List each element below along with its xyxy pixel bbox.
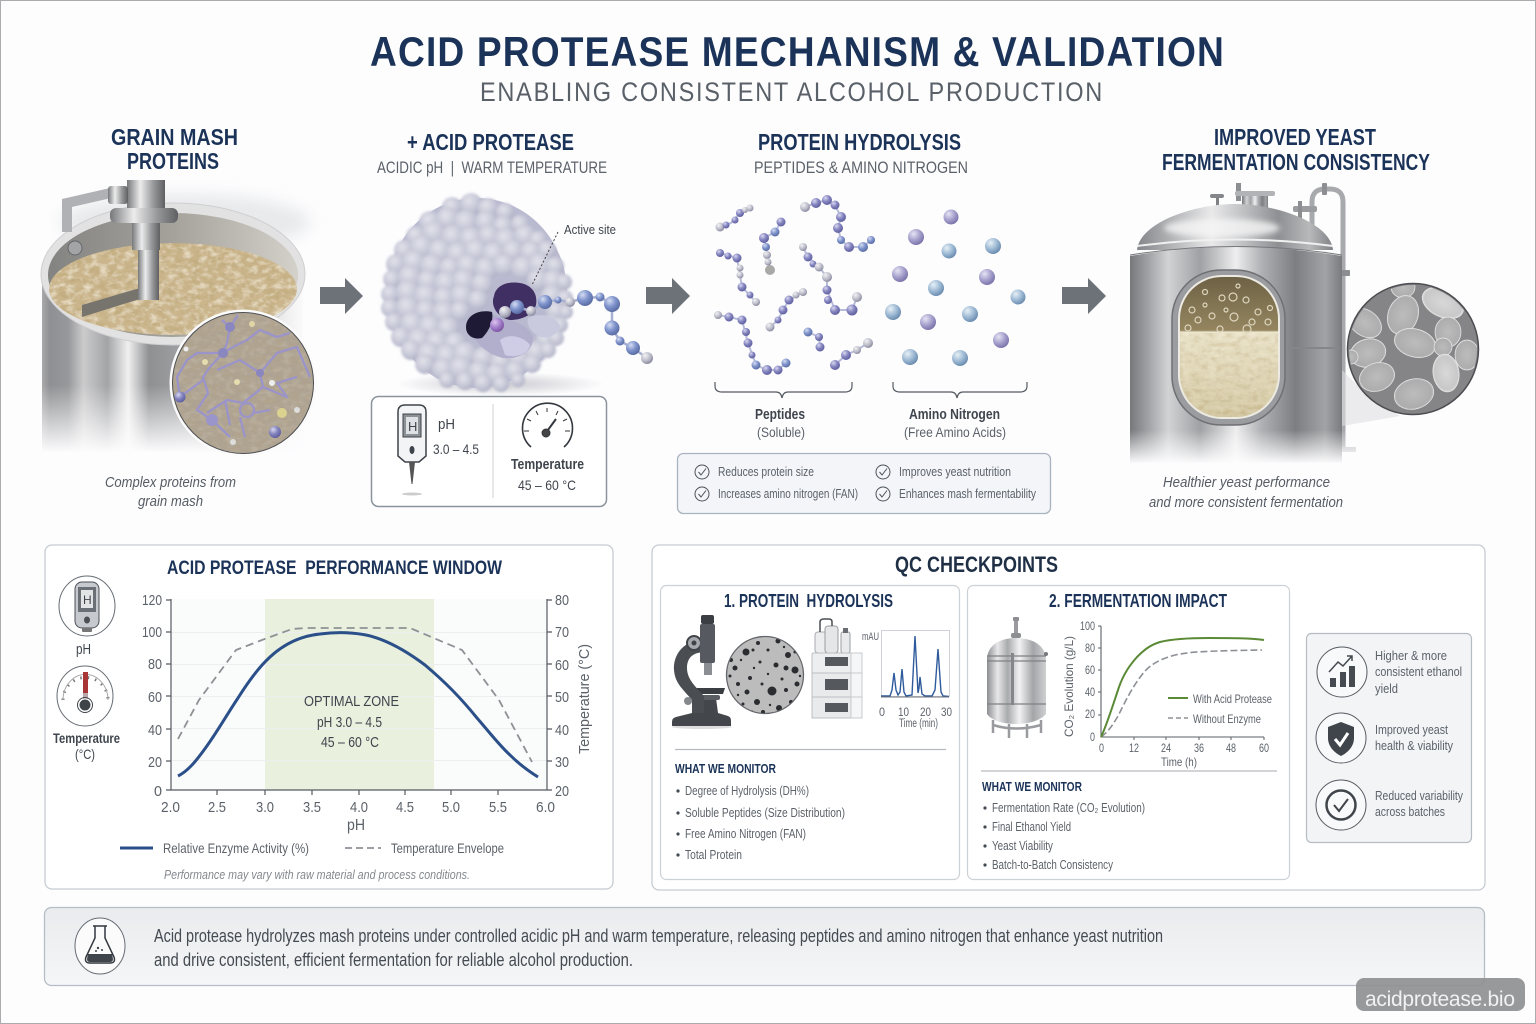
left axis labels: 40 bbox=[148, 722, 162, 739]
step 3: protein hydrolysis bbox=[678, 129, 1050, 514]
caption: complex proteins: Complex proteins from bbox=[105, 474, 236, 491]
x axis labels: 3.0 bbox=[256, 799, 274, 816]
text: pH range: 3.0 – 4.5 bbox=[433, 441, 479, 457]
agitator arm bbox=[67, 192, 115, 232]
chart: CO2 evolution: Time (h) bbox=[1161, 755, 1197, 769]
chart legend: With Acid Protease bbox=[1193, 692, 1272, 706]
chart: CO2 evolution: 20 bbox=[1085, 709, 1095, 721]
monitor list bbox=[675, 761, 845, 862]
icon: pH meter: H bbox=[408, 419, 417, 434]
fermentation tank bbox=[1124, 183, 1359, 477]
chart: CO2 evolution: 80 bbox=[1085, 643, 1095, 655]
subheading: peptides and amino nitrogen: PEPTIDES & AMINO NITROGEN bbox=[754, 159, 968, 177]
left axis labels: 60 bbox=[148, 689, 162, 706]
legend bbox=[120, 840, 504, 856]
text: ethanol yield: yield bbox=[1375, 681, 1398, 696]
right axis labels: 50 bbox=[555, 689, 569, 706]
text: ethanol yield: Higher & more bbox=[1375, 648, 1447, 663]
caption: healthier yeast bbox=[1149, 474, 1343, 511]
left axis labels bbox=[142, 592, 162, 800]
title: ACID PROTEASE MECHANISM & VALIDATION bbox=[370, 28, 1225, 75]
optimal zone label: 45 – 60 °C bbox=[321, 734, 379, 751]
label: pH: pH bbox=[76, 641, 91, 658]
x axis labels: 2.5 bbox=[208, 799, 226, 816]
x axis labels: 4.5 bbox=[396, 799, 414, 816]
heading: grain mash proteins: GRAIN MASH bbox=[111, 124, 238, 150]
legend: Temperature Envelope bbox=[391, 840, 504, 856]
curve: with acid protease bbox=[1101, 638, 1264, 737]
x axis labels: 2.0 bbox=[161, 799, 180, 816]
chart: chromatogram: 20 bbox=[920, 707, 931, 719]
icon: flask bbox=[75, 918, 125, 974]
label: temperature: Temperature bbox=[53, 730, 120, 746]
chart: chromatogram: 10 bbox=[898, 707, 909, 719]
benefits box bbox=[678, 454, 1050, 514]
heading: acid protease: + ACID PROTEASE bbox=[407, 129, 574, 155]
optimal zone label: pH 3.0 – 4.5 bbox=[317, 714, 382, 731]
right axis title: Temperature (°C) bbox=[576, 644, 593, 754]
left axis labels: 0 bbox=[154, 783, 162, 800]
icon: thermometer gauge bbox=[57, 666, 113, 726]
chart: CO2 evolution: 60 bbox=[1259, 743, 1269, 755]
step 4: improved yeast fermentation bbox=[1124, 124, 1479, 511]
heading: protein hydrolysis: PROTEIN HYDROLYSIS bbox=[758, 129, 961, 155]
icon: temperature gauge bbox=[522, 403, 572, 447]
optimal zone label: OPTIMAL ZONE bbox=[304, 693, 399, 710]
monitor list: Final Ethanol Yield bbox=[992, 820, 1071, 834]
chart: chromatogram: 30 bbox=[941, 707, 952, 719]
label: temperature bbox=[53, 730, 120, 762]
curve: temperature envelope bbox=[178, 628, 532, 762]
text: reduced variability: Reduced variability bbox=[1375, 788, 1463, 803]
caption: healthier yeast: and more consistent fermentation bbox=[1149, 494, 1343, 511]
chart: chromatogram: mAU bbox=[862, 631, 879, 643]
right axis labels bbox=[555, 592, 569, 800]
curve: without enzyme bbox=[1101, 650, 1262, 737]
chart legend: Without Enzyme bbox=[1193, 712, 1261, 726]
chart: CO2 evolution: 48 bbox=[1226, 743, 1236, 755]
left axis labels: 80 bbox=[148, 656, 162, 673]
right axis labels: 30 bbox=[555, 754, 569, 771]
monitor list: Degree of Hydrolysis (DH%) bbox=[685, 783, 809, 798]
micrograph bbox=[726, 636, 804, 714]
heading: grain mash proteins bbox=[111, 124, 238, 174]
left axis labels: 120 bbox=[142, 592, 162, 609]
label: amino nitrogen bbox=[893, 382, 1027, 440]
monitor list: Batch-to-Batch Consistency bbox=[992, 858, 1114, 872]
icon: HPLC instrument bbox=[812, 619, 862, 718]
heading: QC checkpoints: QC CHECKPOINTS bbox=[895, 552, 1058, 577]
footnote: Performance may vary with raw material and process conditions. bbox=[164, 867, 470, 882]
heading: performance window: ACID PROTEASE PERFORMANCE WINDOW bbox=[167, 558, 502, 579]
heading: grain mash proteins: PROTEINS bbox=[127, 148, 219, 174]
summary text bbox=[154, 926, 1163, 970]
watermark: acidprotease.bio bbox=[1365, 988, 1515, 1011]
icon: shield check bbox=[1316, 713, 1366, 763]
label: amino nitrogen: (Free Amino Acids) bbox=[904, 424, 1006, 440]
monitor list: WHAT WE MONITOR bbox=[675, 761, 776, 776]
inset: yeast cells bbox=[1342, 276, 1479, 426]
icon: pH meter bbox=[59, 576, 115, 636]
arrow 1 bbox=[320, 278, 363, 314]
heading: improved yeast fermentation consistency bbox=[1162, 124, 1430, 175]
text: temperature range bbox=[511, 456, 584, 493]
x axis labels bbox=[161, 799, 555, 816]
panel: performance window bbox=[45, 545, 613, 889]
chart: chromatogram: 0 bbox=[879, 707, 885, 719]
benefits box: Reduces protein size bbox=[718, 465, 814, 479]
label: active site: Active site bbox=[564, 222, 616, 237]
text: ethanol yield: consistent ethanol bbox=[1375, 664, 1462, 679]
label: peptides bbox=[715, 382, 852, 440]
x axis labels: 5.5 bbox=[489, 799, 507, 816]
benefits box: Improves yeast nutrition bbox=[899, 465, 1011, 479]
chart: CO2 evolution: 100 bbox=[1080, 621, 1095, 633]
substrate peptide chain bbox=[490, 290, 653, 364]
icon: check circle bbox=[1316, 780, 1366, 830]
text: temperature range: 45 – 60 °C bbox=[518, 477, 576, 493]
chart legend bbox=[1168, 692, 1272, 726]
summary text: Acid protease hydrolyzes mash proteins under controlled acidic pH and warm temperature, releasing peptides and amino nitrogen that enhance yeast nutrition bbox=[154, 926, 1163, 946]
label: amino nitrogen: Amino Nitrogen bbox=[909, 406, 1000, 423]
label: temperature: (°C) bbox=[75, 746, 95, 762]
chart: CO2 evolution: 40 bbox=[1085, 687, 1095, 699]
inset: protein network magnified bbox=[171, 311, 315, 455]
chart: CO2 evolution: 36 bbox=[1194, 743, 1204, 755]
monitor list: Total Protein bbox=[685, 847, 742, 862]
text: yeast health: Improved yeast bbox=[1375, 722, 1448, 737]
x axis labels: 5.0 bbox=[442, 799, 460, 816]
chart: CO2 evolution bbox=[1062, 621, 1272, 769]
monitor list: Free Amino Nitrogen (FAN) bbox=[685, 826, 806, 841]
summary text: and drive consistent, efficient fermentation for reliable alcohol production. bbox=[154, 950, 633, 970]
card heading: 2. FERMENTATION IMPACT bbox=[1049, 591, 1227, 611]
conditions box bbox=[372, 396, 606, 506]
x axis labels: 6.0 bbox=[536, 799, 555, 816]
text: reduced variability: across batches bbox=[1375, 804, 1445, 819]
summary banner bbox=[44, 908, 1484, 986]
heading: improved yeast fermentation consistency: FERMENTATION CONSISTENCY bbox=[1162, 149, 1430, 175]
icon: microscope bbox=[672, 615, 732, 729]
right axis labels: 70 bbox=[555, 624, 569, 641]
icon: pH meter: H bbox=[83, 593, 92, 607]
active site cavity bbox=[472, 314, 533, 358]
chart: CO2 evolution: 12 bbox=[1129, 743, 1139, 755]
heading: improved yeast fermentation consistency: IMPROVED YEAST bbox=[1214, 124, 1376, 150]
chart: CO2 evolution: 24 bbox=[1161, 743, 1171, 755]
caption: healthier yeast: Healthier yeast performance bbox=[1163, 474, 1330, 491]
card heading: 1. PROTEIN HYDROLYSIS bbox=[724, 591, 893, 611]
right axis labels: 20 bbox=[555, 783, 569, 800]
monitor list: Soluble Peptides (Size Distribution) bbox=[685, 805, 845, 820]
chart: performance window bbox=[142, 592, 593, 834]
subtitle: ENABLING CONSISTENT ALCOHOL PRODUCTION bbox=[480, 77, 1104, 107]
text: temperature range: Temperature bbox=[511, 456, 584, 473]
arrow 2 bbox=[646, 278, 690, 314]
label: peptides: Peptides bbox=[755, 406, 805, 423]
benefits box: Enhances mash fermentability bbox=[899, 487, 1037, 501]
curve: relative enzyme activity bbox=[178, 633, 538, 777]
left axis labels: 20 bbox=[148, 754, 162, 771]
free amino acids bbox=[885, 210, 1026, 366]
subheading: conditions: ACIDIC pH | WARM TEMPERATURE bbox=[377, 159, 607, 177]
benefits box: Increases amino nitrogen (FAN) bbox=[718, 487, 858, 501]
x axis labels: 4.0 bbox=[350, 799, 368, 816]
text: reduced variability bbox=[1375, 788, 1463, 819]
enzyme illustration bbox=[381, 193, 605, 396]
watermark bbox=[1356, 978, 1525, 1011]
arrow 3 bbox=[1062, 278, 1106, 314]
chart: CO2 evolution: 0 bbox=[1099, 743, 1104, 755]
mash vessel illustration bbox=[36, 180, 313, 474]
chart: CO2 evolution: CO₂ Evolution (g/L) bbox=[1062, 636, 1076, 737]
bolt bbox=[68, 241, 82, 255]
chart: CO2 evolution: 0 bbox=[1090, 732, 1095, 744]
icon: pH meter bbox=[398, 405, 426, 496]
optimal zone label bbox=[304, 693, 399, 751]
text: yeast health: health & viability bbox=[1375, 738, 1453, 753]
x axis title: pH bbox=[347, 817, 365, 834]
step 2: acid protease bbox=[372, 129, 653, 506]
monitor list: Fermentation Rate (CO₂ Evolution) bbox=[992, 801, 1145, 815]
caption: complex proteins bbox=[105, 474, 236, 510]
caption: complex proteins: grain mash bbox=[138, 493, 203, 510]
left axis labels: 100 bbox=[142, 624, 162, 641]
text: yeast health bbox=[1375, 722, 1453, 753]
label: active site bbox=[532, 222, 616, 285]
monitor list: Yeast Viability bbox=[992, 839, 1054, 853]
right axis labels: 40 bbox=[555, 722, 569, 739]
right axis labels: 60 bbox=[555, 657, 569, 674]
step 1: grain mash proteins bbox=[36, 124, 315, 510]
x axis labels: 3.5 bbox=[303, 799, 321, 816]
monitor list bbox=[982, 779, 1145, 872]
label: peptides: (Soluble) bbox=[757, 424, 805, 440]
outcomes box bbox=[1306, 634, 1472, 842]
text: pH range bbox=[433, 416, 479, 457]
chart: chromatogram bbox=[862, 630, 952, 730]
icon: small tank bbox=[987, 617, 1048, 738]
monitor list: WHAT WE MONITOR bbox=[982, 779, 1082, 794]
text: pH range: pH bbox=[438, 416, 455, 433]
peptide chains bbox=[714, 195, 875, 375]
card: protein hydrolysis bbox=[660, 586, 960, 880]
text: ethanol yield bbox=[1375, 648, 1462, 696]
panel: QC checkpoints bbox=[652, 545, 1485, 890]
card: fermentation impact bbox=[968, 586, 1290, 880]
optimal zone band bbox=[265, 599, 434, 790]
right axis labels: 80 bbox=[555, 592, 569, 609]
chart: chromatogram: Time (min) bbox=[899, 718, 938, 730]
icon: rising yield bars bbox=[1317, 647, 1367, 697]
legend: Relative Enzyme Activity (%) bbox=[163, 840, 309, 856]
chart: CO2 evolution: 60 bbox=[1085, 665, 1095, 677]
